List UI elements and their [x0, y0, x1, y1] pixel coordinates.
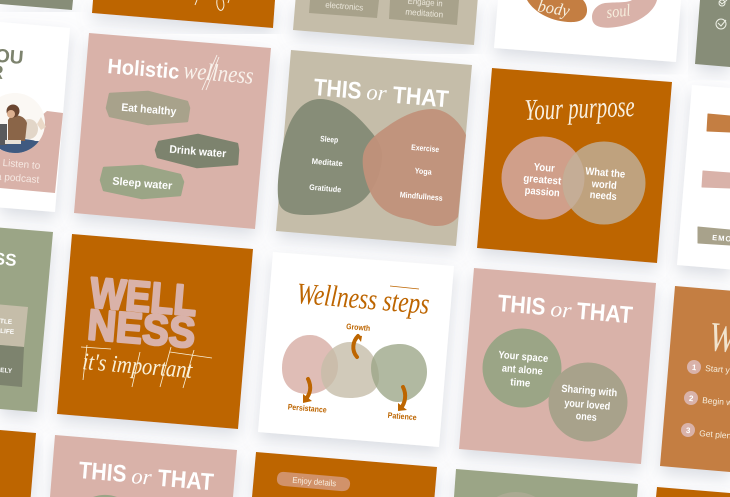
step 3: 3 [686, 426, 691, 435]
circle: greatest passion [502, 136, 584, 220]
blob: body [527, 0, 587, 22]
pill: drink water [156, 135, 238, 167]
card: bottom left orange [0, 430, 36, 497]
circle: your space [482, 328, 562, 408]
circle top [497, 492, 535, 497]
title: THIS or THAT: or [131, 463, 153, 490]
title: THIS or THAT: THAT [576, 298, 634, 329]
labels: left list: Gratitude [309, 183, 342, 194]
blob: pink [282, 335, 338, 394]
panel: your purpose venn [477, 68, 672, 263]
pill: eat healthy: Eat healthy [121, 102, 177, 118]
blob: sage [278, 99, 382, 215]
text: what the world needs [585, 165, 626, 203]
title: THIS or THAT: THIS [497, 290, 547, 321]
label: pink [702, 171, 730, 188]
icon: check [719, 0, 727, 6]
text: listen to a podcast [0, 158, 41, 186]
box: dark sage [0, 345, 24, 387]
blob: tan [321, 342, 379, 398]
circle: world needs [562, 142, 646, 224]
photo: woman with laptop [0, 93, 46, 154]
labels: left list: Meditate [311, 157, 344, 168]
box: dark sage: ELY [0, 367, 13, 375]
circle top [93, 495, 117, 497]
card: top orange [92, 0, 275, 28]
circle overlap [562, 152, 584, 208]
title: THIS or THAT: or [366, 79, 388, 106]
blob: soul: soul [605, 1, 632, 22]
heading: wellness script: wellness [183, 56, 255, 89]
card: top right dark sage checklist [695, 0, 730, 67]
heading: WELL NESS: WELL [88, 269, 199, 326]
card: left sage [0, 228, 53, 412]
labels: left list [309, 134, 344, 194]
panel: wellness steps [258, 252, 454, 447]
blob: sage [371, 344, 427, 402]
text: sharing with your loved ones: your loved [564, 397, 611, 413]
circle: sharing [548, 362, 628, 442]
pill: enjoy details [277, 472, 350, 491]
blob: soul [592, 0, 657, 28]
title: THIS or THAT [313, 74, 450, 113]
title: THIS or THAT: THAT [157, 465, 215, 496]
labels: right list: Yoga [414, 166, 433, 177]
text: your greatest passion: greatest [523, 172, 562, 188]
pink panel [0, 111, 63, 193]
text: your space ant alone time: time [510, 376, 531, 390]
label: EMO [698, 227, 730, 245]
box: tan: LIFE [0, 328, 15, 336]
text: your greatest passion [523, 161, 562, 199]
title: THIS or THAT: THIS [313, 74, 363, 105]
text: sharing with your loved ones [561, 383, 618, 424]
text: listen to a podcast: Listen to [2, 158, 41, 172]
heading: WELL NESS: NESS [86, 301, 197, 358]
card: top left sage [0, 0, 73, 10]
text: your space ant alone time: Your space [498, 349, 549, 365]
text: your greatest passion: passion [524, 185, 560, 199]
card: right light orange numbered list [660, 286, 730, 472]
heading: Holistic: Holistic [107, 55, 181, 84]
panel: holistic wellness [74, 33, 271, 229]
card: right white labels [677, 85, 730, 269]
card: bottom sage [454, 469, 638, 497]
heading: WELL NESS [86, 269, 199, 358]
step 3 [681, 423, 730, 441]
pill: sleep water: Sleep water [112, 176, 173, 193]
step 1 [687, 360, 730, 375]
step 2: 2 [689, 394, 694, 403]
title: THIS or THAT [78, 457, 215, 496]
script: it's important [81, 345, 212, 388]
title: THIS or THAT: or [550, 296, 573, 323]
panel: wellness it's important [57, 234, 253, 429]
labels: right list [399, 143, 443, 203]
heading fragment [0, 45, 24, 84]
labels: left list: Sleep [320, 134, 339, 145]
text: your space ant alone time: ant alone [501, 362, 543, 378]
text: your space ant alone time [498, 349, 549, 390]
card: bottom pink this or that [50, 435, 237, 497]
step 1: 1 [692, 363, 697, 372]
card: top tan with boxes [293, 0, 478, 45]
card: bottom right orange [656, 487, 730, 497]
box: meditation [389, 0, 459, 25]
card: bottom orange enjoy details [252, 452, 437, 497]
blob: terracotta [363, 109, 466, 226]
label: Growth: Growth [346, 322, 371, 333]
text: what the world needs: What the [585, 165, 626, 181]
title: Wellness steps: Wellness steps [295, 276, 431, 321]
box: meditation: meditation [405, 6, 444, 20]
arrow: growth [353, 335, 362, 357]
labels: right list: Mindfullness [399, 190, 443, 203]
text: what the world needs: needs [589, 189, 617, 203]
script: it's important: it's important [82, 347, 194, 383]
title: THIS or THAT: THIS [78, 457, 128, 488]
step 2 [684, 391, 730, 408]
pill: eat healthy [107, 92, 189, 124]
pill: drink water: Drink water [169, 144, 227, 160]
text: what the world needs: world [590, 178, 617, 192]
label: Patience: Patience [387, 411, 418, 422]
pill: enjoy details: Enjoy details [292, 475, 337, 488]
box: tan [0, 304, 28, 347]
panel: this or that pink circles [459, 268, 656, 464]
label: orange [707, 114, 730, 132]
arrow: patience [398, 387, 407, 411]
title: Your purpose: Your purpose [524, 89, 635, 127]
title: THIS or THAT [497, 290, 634, 329]
arrow: persistance [303, 379, 312, 403]
card: top white body and soul [494, 0, 681, 62]
text: sharing with your loved ones: ones [575, 410, 597, 424]
box: electronics [309, 0, 379, 18]
labels: right list: Exercise [411, 143, 440, 154]
pill: sleep water [101, 166, 183, 198]
text: sharing with your loved ones: Sharing with [561, 383, 618, 399]
label: Persistance: Persistance [287, 402, 327, 415]
title: THIS or THAT: THAT [392, 82, 450, 113]
icon: check [716, 19, 726, 29]
card: left white listen to a podcast [0, 22, 70, 212]
panel: this or that tan venn [276, 50, 472, 246]
text: your greatest passion: Your [533, 161, 555, 175]
